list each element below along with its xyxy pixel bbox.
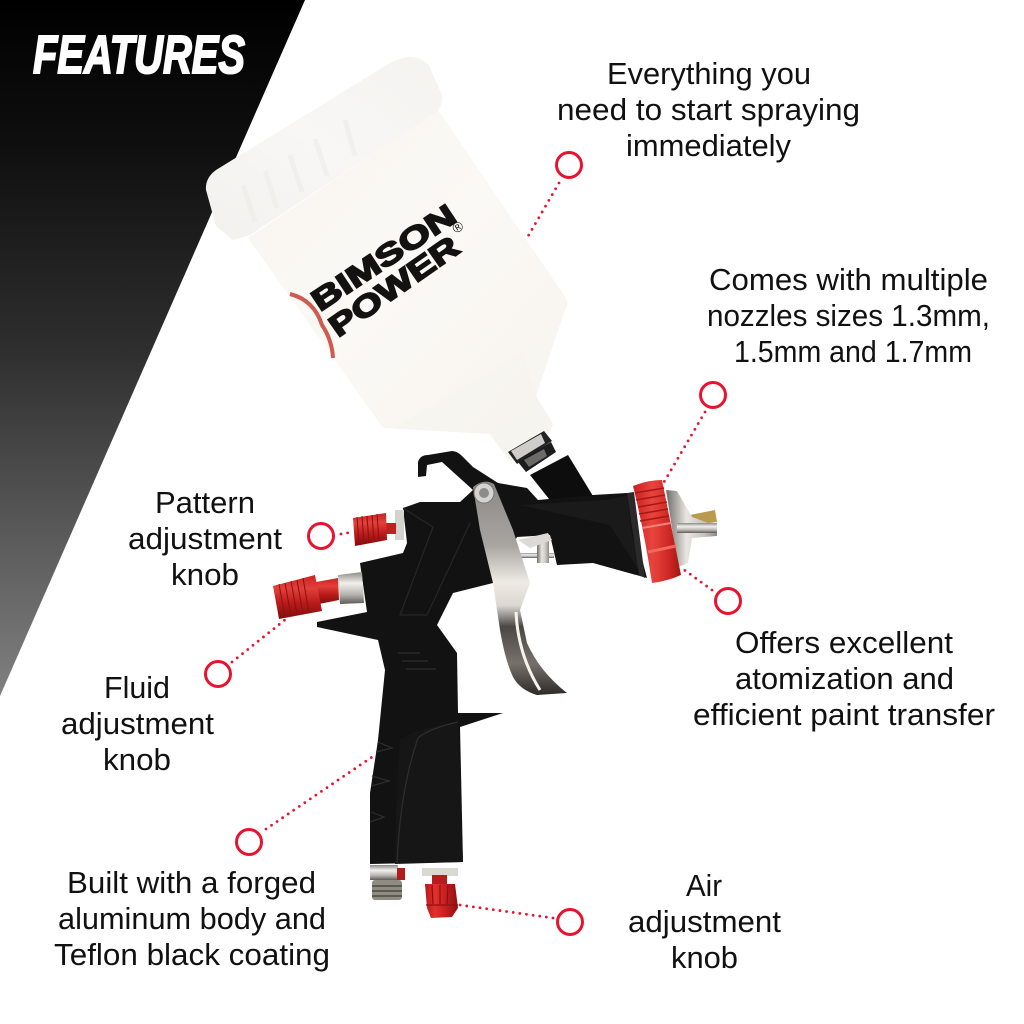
- text: Comes with multiple: [709, 262, 988, 297]
- text: Pattern: [155, 485, 255, 520]
- callout: nozzle sizes: [664, 262, 990, 482]
- text: [693, 625, 995, 732]
- pattern adjustment knob: [353, 510, 404, 546]
- callout: fluid adjustment knob: [61, 619, 286, 777]
- cup neck: [487, 396, 553, 462]
- text: 1.5mm and 1.7mm: [734, 334, 972, 369]
- text: immediately: [626, 128, 791, 163]
- nozzle assembly: [627, 480, 717, 583]
- trigger slot: [516, 612, 540, 690]
- trigger: [473, 482, 567, 695]
- title: FEATURES: [33, 25, 245, 85]
- callout: forged aluminum body: [54, 757, 372, 972]
- text: knob: [671, 940, 738, 975]
- paint cup: [206, 57, 567, 462]
- cup body: [248, 110, 567, 434]
- text: Fluid: [104, 670, 170, 705]
- gold tip: [690, 510, 717, 525]
- cup logo: BIMSON POWER: [306, 199, 467, 344]
- grip details: [370, 508, 470, 864]
- text: [628, 868, 781, 975]
- text: efficient paint transfer: [693, 697, 995, 732]
- red fluid nozzle collar: [627, 480, 681, 583]
- needle packing: [518, 533, 554, 563]
- text: [128, 485, 282, 592]
- marker: [308, 524, 353, 548]
- cup lid: [206, 57, 442, 240]
- text: adjustment: [61, 706, 214, 741]
- text: atomization and: [735, 661, 954, 696]
- red logo seen through cup: [290, 294, 333, 358]
- marker: [683, 569, 740, 614]
- trigger pivot screw: [474, 483, 494, 503]
- text: need to start spraying: [557, 92, 860, 127]
- text: [707, 262, 990, 369]
- marker: [664, 382, 726, 482]
- cup logo: BIMSON POWER: POWER: [323, 230, 466, 344]
- text: Built with a forged: [67, 865, 316, 900]
- cup logo: BIMSON POWER: BIMSON: [306, 199, 462, 318]
- text: [54, 865, 330, 972]
- text: adjustment: [128, 521, 282, 556]
- body highlight: [520, 495, 640, 572]
- gun body: [317, 451, 647, 864]
- air cap: [666, 490, 717, 567]
- bottom air fitting: [370, 865, 405, 900]
- marker: [236, 757, 372, 854]
- callout: everything you need: [527, 56, 860, 238]
- text: Teflon black coating: [54, 937, 330, 972]
- text: Air: [686, 868, 722, 903]
- marker: [206, 619, 286, 686]
- marker: [527, 152, 582, 238]
- fluid adjustment knob: [273, 572, 364, 619]
- callout: air adjustment knob: [460, 868, 781, 975]
- text: Offers excellent: [735, 625, 953, 660]
- air adjustment knob on gun: [422, 868, 458, 918]
- marker: [460, 905, 582, 934]
- cup connector fittings: [508, 431, 593, 504]
- text: Everything you: [607, 56, 811, 91]
- grip shading: [395, 722, 463, 864]
- spray gun product illustration: [206, 57, 717, 918]
- callout: atomization: [683, 569, 995, 732]
- text: [61, 670, 214, 777]
- background gradient wedge: [0, 0, 305, 696]
- cup logo: BIMSON POWER: ®: [449, 217, 467, 237]
- text: aluminum body and: [58, 901, 326, 936]
- callout: pattern adjustment knob: [128, 485, 353, 592]
- text: knob: [171, 557, 239, 592]
- text: nozzles sizes 1.3mm,: [707, 298, 990, 333]
- text: adjustment: [628, 904, 781, 939]
- text: knob: [103, 742, 171, 777]
- text: [557, 56, 860, 163]
